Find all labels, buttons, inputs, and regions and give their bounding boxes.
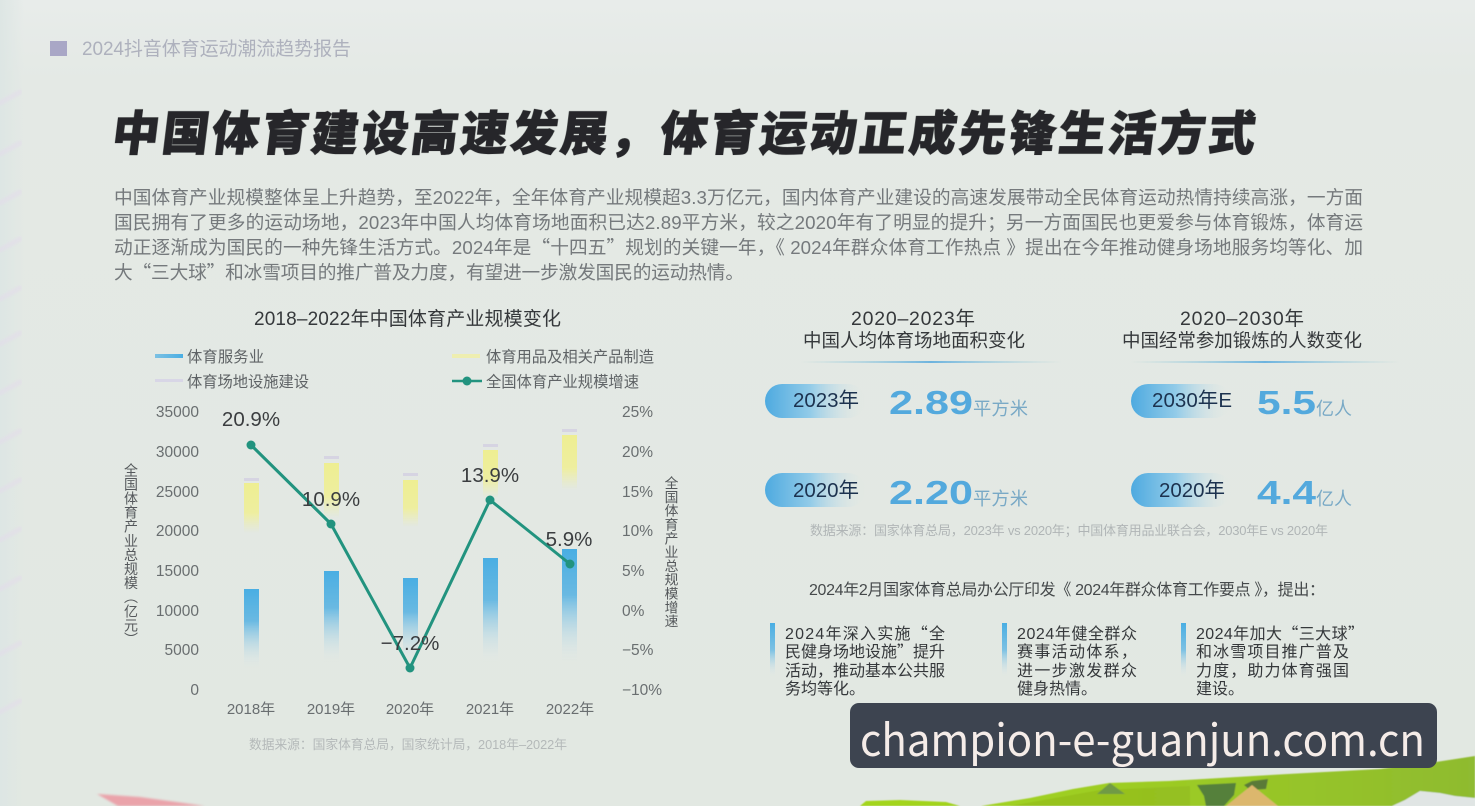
growth rate labels: 5.9% xyxy=(546,528,592,551)
right percent axis: 15% xyxy=(622,484,653,501)
left value axis: 35000 xyxy=(156,404,199,421)
right axis title: 全国体育产业总规模增速 xyxy=(662,475,678,629)
chart legend: 体育场地设施建设 xyxy=(187,374,309,391)
policy point 3: 建设。 xyxy=(1196,680,1244,698)
report name: 2024抖音体育运动潮流趋势报告 xyxy=(82,38,351,60)
right percent axis: −5% xyxy=(622,642,654,659)
growth rate labels: −7.2% xyxy=(381,632,439,655)
intro paragraph: 国民拥有了更多的运动场地，2023年中国人均体育场地面积已达2.89平方米，较之2020年有了明显的提升；另一方面国民也更爱参与体育锻炼，体育运 xyxy=(114,212,1363,233)
chart source note: 数据来源：国家体育总局，国家统计局，2018年–2022年 xyxy=(249,737,567,752)
policy point 1: 活动，推动基本公共服 xyxy=(785,662,945,680)
row: 2023 area: 2023年 xyxy=(793,389,859,412)
panel: sports area per capita xyxy=(765,308,1062,511)
left value axis: 20000 xyxy=(156,523,199,540)
bar 2021 xyxy=(483,444,498,663)
right percent axis: 5% xyxy=(622,563,645,580)
left value axis: 5000 xyxy=(165,642,199,659)
right percent axis: −10% xyxy=(622,682,662,699)
growth rate labels: 13.9% xyxy=(461,464,519,487)
chart legend: 体育服务业 xyxy=(187,349,264,366)
right percent axis: 20% xyxy=(622,444,653,461)
policy point 2: 健身热情。 xyxy=(1017,680,1097,698)
policy point 2: 进一步激发群众 xyxy=(1017,662,1137,680)
row: 2030E people xyxy=(1131,384,1352,421)
bar 2019 xyxy=(324,456,339,663)
intro paragraph: 中国体育产业规模整体呈上升趋势，至2022年，全年体育产业规模超3.3万亿元，国内体育产业建设的高速发展带动全民体育运动热情持续高涨，一方面 xyxy=(114,187,1363,208)
left value axis: 30000 xyxy=(156,444,199,461)
growth rate labels: 20.9% xyxy=(222,408,280,431)
row: 2030E people: 亿人 xyxy=(1316,399,1352,419)
decoration: pink kite at bottom left xyxy=(97,794,205,806)
row: 2020 area: 2.20 xyxy=(889,474,973,511)
right percent axis: 0% xyxy=(622,603,645,620)
panel heading: 2020–2023年 xyxy=(851,308,975,330)
row: 2030E people: 2030年E xyxy=(1152,389,1232,412)
year axis: 2018年 xyxy=(227,701,275,718)
row: 2020 area xyxy=(765,473,1028,511)
year axis: 2020年 xyxy=(386,701,434,718)
chart legend xyxy=(155,349,654,391)
panel heading xyxy=(803,308,1025,351)
panel heading: 2020–2030年 xyxy=(1180,308,1304,330)
left value axis xyxy=(156,404,199,699)
green hill xyxy=(860,756,1475,806)
growth rate line xyxy=(246,440,574,672)
intro paragraph: 动正逐渐成为国民的一种先锋生活方式。2024年是“十四五”规划的关键一年，《 2024年群众体育工作热点 》提出在今年推动健身场地服务均等化、加 xyxy=(114,233,1363,260)
policy point 3: 2024年加大“三大球” xyxy=(1196,620,1364,644)
panel heading xyxy=(1122,308,1362,351)
row: 2023 area xyxy=(765,384,1028,421)
row: 2020 people: 4.4 xyxy=(1257,474,1317,511)
row: 2030E people: 5.5 xyxy=(1257,384,1316,421)
policy point 2: 赛事活动体系， xyxy=(1017,642,1137,661)
left axis title: 全国体育产业总规模（亿元） xyxy=(123,462,139,646)
row: 2020 area: 2020年 xyxy=(793,479,859,502)
bar 2020 xyxy=(403,473,418,663)
right percent axis xyxy=(622,404,662,699)
policy heading: 2024年2月国家体育总局办公厅印发《 2024年群众体育工作要点 》，提出： xyxy=(809,581,1325,599)
policy point 2 xyxy=(1002,623,1137,698)
row: 2023 area: 2.89 xyxy=(889,384,973,421)
panel: industry scale chart xyxy=(123,308,678,752)
data source note: 数据来源：国家体育总局，2023年 vs 2020年；中国体育用品业联合会，2030年E vs 2020年 xyxy=(810,523,1328,539)
dark trees xyxy=(1197,783,1236,806)
policy point 3: 和冰雪项目推广普及 xyxy=(1196,643,1349,661)
row: 2020 people: 亿人 xyxy=(1316,489,1352,509)
stacked bars xyxy=(244,429,577,669)
grey mountain xyxy=(1392,791,1475,806)
right percent axis: 10% xyxy=(622,523,653,540)
row: 2023 area: 平方米 xyxy=(973,398,1028,419)
tent xyxy=(1226,785,1278,806)
growth rate labels: 10.9% xyxy=(302,488,360,511)
year axis xyxy=(227,701,594,718)
panel: regular exercisers xyxy=(1122,308,1400,511)
year axis: 2021年 xyxy=(466,701,514,718)
main title: 中国体育建设高速发展，体育运动正成先锋生活方式 xyxy=(109,95,1260,164)
policy point 2: 2024年健全群众 xyxy=(1017,625,1137,643)
policy point 3 xyxy=(1181,620,1364,698)
small green peak xyxy=(1097,783,1125,794)
policy point 3: 力度，助力体育强国 xyxy=(1196,662,1349,680)
right percent axis: 25% xyxy=(622,404,653,421)
policy point 1: 民健身场地设施”提升 xyxy=(785,638,945,662)
intro paragraph: 大“三大球”和冰雪项目的推广普及力度，有望进一步激发国民的运动热情。 xyxy=(114,258,744,285)
header square icon xyxy=(50,41,67,56)
policy point 1: 务均等化。 xyxy=(785,680,865,698)
chart legend: 体育用品及相关产品制造 xyxy=(486,349,654,366)
row: 2020 people: 2020年 xyxy=(1159,479,1225,502)
watermark banner: champion-e-guanjun.com.cn xyxy=(860,705,1425,769)
decoration: landscape at bottom right xyxy=(860,756,1475,806)
year axis: 2022年 xyxy=(546,701,594,718)
chart title: 2018–2022年中国体育产业规模变化 xyxy=(254,308,561,330)
panel heading: 中国经常参加锻炼的人数变化 xyxy=(1122,330,1362,351)
left hill shade xyxy=(1010,786,1190,806)
policy point 1: 2024年深入实施“全 xyxy=(785,620,945,644)
left value axis: 15000 xyxy=(156,563,199,580)
growth rate labels xyxy=(222,408,592,655)
row: 2020 people xyxy=(1131,473,1352,511)
row: 2020 area: 平方米 xyxy=(973,488,1028,509)
intro paragraph xyxy=(114,187,1363,285)
year axis: 2019年 xyxy=(307,701,355,718)
bar 2018 xyxy=(244,478,259,669)
report header tag xyxy=(50,38,351,60)
left value axis: 25000 xyxy=(156,484,199,501)
bar 2022 xyxy=(562,429,577,664)
policy point 1 xyxy=(770,620,945,698)
left value axis: 0 xyxy=(190,682,199,699)
left value axis: 10000 xyxy=(156,603,199,620)
chart legend: 全国体育产业规模增速 xyxy=(486,373,639,391)
panel heading: 中国人均体育场地面积变化 xyxy=(803,330,1025,351)
